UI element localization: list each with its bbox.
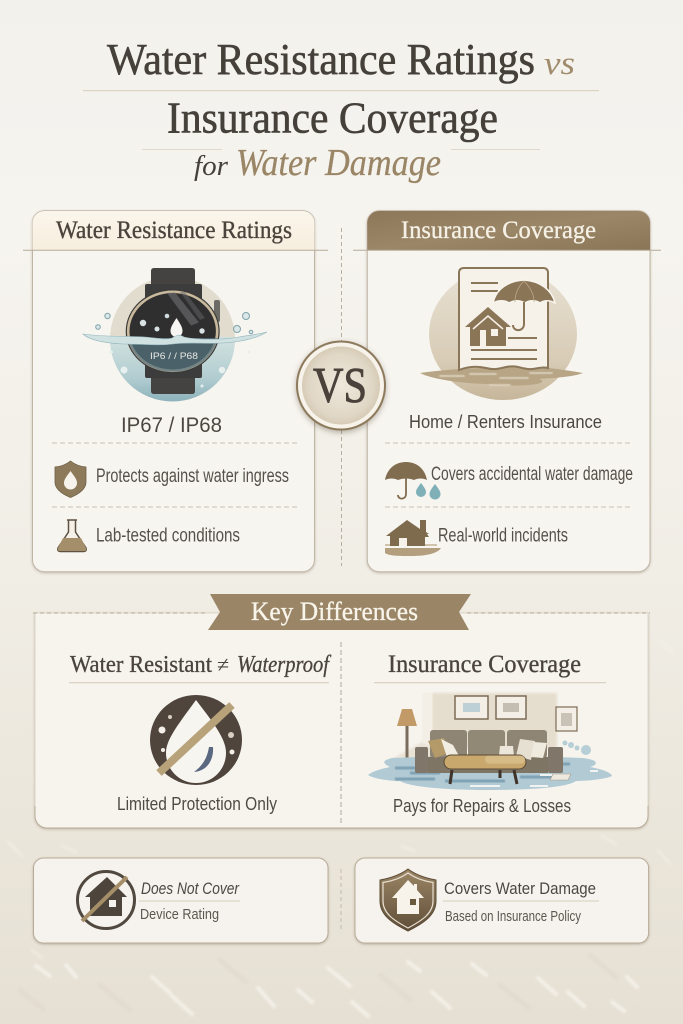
- icon: policy document with umbrella and house: [420, 268, 583, 400]
- icon: house with flood: [385, 520, 441, 556]
- lamp: [397, 709, 417, 764]
- subheading: water resistant not waterproof: ≠: [217, 652, 229, 677]
- subheading: water resistant not waterproof: Water Resistant: [70, 652, 212, 678]
- heading: Insurance Coverage: [401, 217, 596, 244]
- title line 2: Insurance Coverage: [167, 94, 498, 142]
- pictures: [455, 696, 577, 731]
- panel: key differences: [33, 594, 650, 828]
- icon: watch in water: [83, 268, 267, 407]
- banner: Key Differences: [251, 597, 418, 626]
- umbrella: [493, 280, 555, 303]
- text: protects against water ingress: Protects against water ingress: [96, 466, 289, 487]
- vs badge: VS: [313, 356, 367, 412]
- subheading: insurance coverage: Insurance Coverage: [388, 651, 581, 678]
- water: [368, 756, 612, 790]
- icon: shield with drop: [55, 461, 86, 498]
- title line 1: vs: [544, 46, 575, 82]
- text: covers water damage: Covers Water Damage: [444, 879, 596, 898]
- cushions: [428, 738, 547, 760]
- text: lab-tested conditions: Lab-tested conditions: [96, 526, 240, 546]
- text: real-world incidents: Real-world incidents: [438, 526, 568, 546]
- title line 1: Water Resistance Ratings: [107, 35, 535, 84]
- house: [465, 307, 511, 346]
- caption: pays for repairs & losses: Pays for Repairs & Losses: [393, 795, 571, 816]
- banner: [208, 594, 471, 630]
- title line 3: for: [194, 151, 228, 182]
- icon: umbrella with drops: [385, 462, 440, 500]
- icon: flooded living room: [368, 693, 612, 790]
- table: [444, 755, 526, 784]
- icon: droplet on watch face: [170, 318, 182, 337]
- icon: crossed-out water drop: [150, 695, 242, 785]
- label: home / renters insurance: Home / Renters Insurance: [409, 411, 602, 432]
- couch: [415, 730, 563, 773]
- text: device rating: Device Rating: [140, 907, 219, 923]
- center dashed divider: [340, 228, 342, 566]
- text: based on insurance policy: Based on Insurance Policy: [445, 909, 582, 925]
- callout: covers water damage: [355, 858, 649, 943]
- heading: Water Resistance Ratings: [56, 217, 292, 244]
- subheading: water resistant not waterproof: Waterproof: [237, 652, 332, 678]
- callout: does not cover: [34, 858, 328, 943]
- label: IP67 / IP68: IP67 / IP68: [121, 413, 222, 437]
- icon: crossed-out house: [78, 872, 134, 928]
- title: [83, 35, 599, 184]
- icon: shield with house: [380, 869, 436, 931]
- icon: flask: [58, 520, 86, 552]
- panel: insurance coverage: [353, 211, 661, 572]
- caption: limited protection only: Limited Protection Only: [117, 794, 277, 814]
- subheading: water resistant not waterproof: [70, 652, 332, 678]
- panel: water resistance ratings: [23, 211, 328, 572]
- title line 3: Water Damage: [236, 142, 441, 184]
- text: does not cover: Does Not Cover: [141, 880, 240, 898]
- vs badge: [297, 342, 385, 430]
- watch face label: IP6 / / P68: [150, 351, 198, 362]
